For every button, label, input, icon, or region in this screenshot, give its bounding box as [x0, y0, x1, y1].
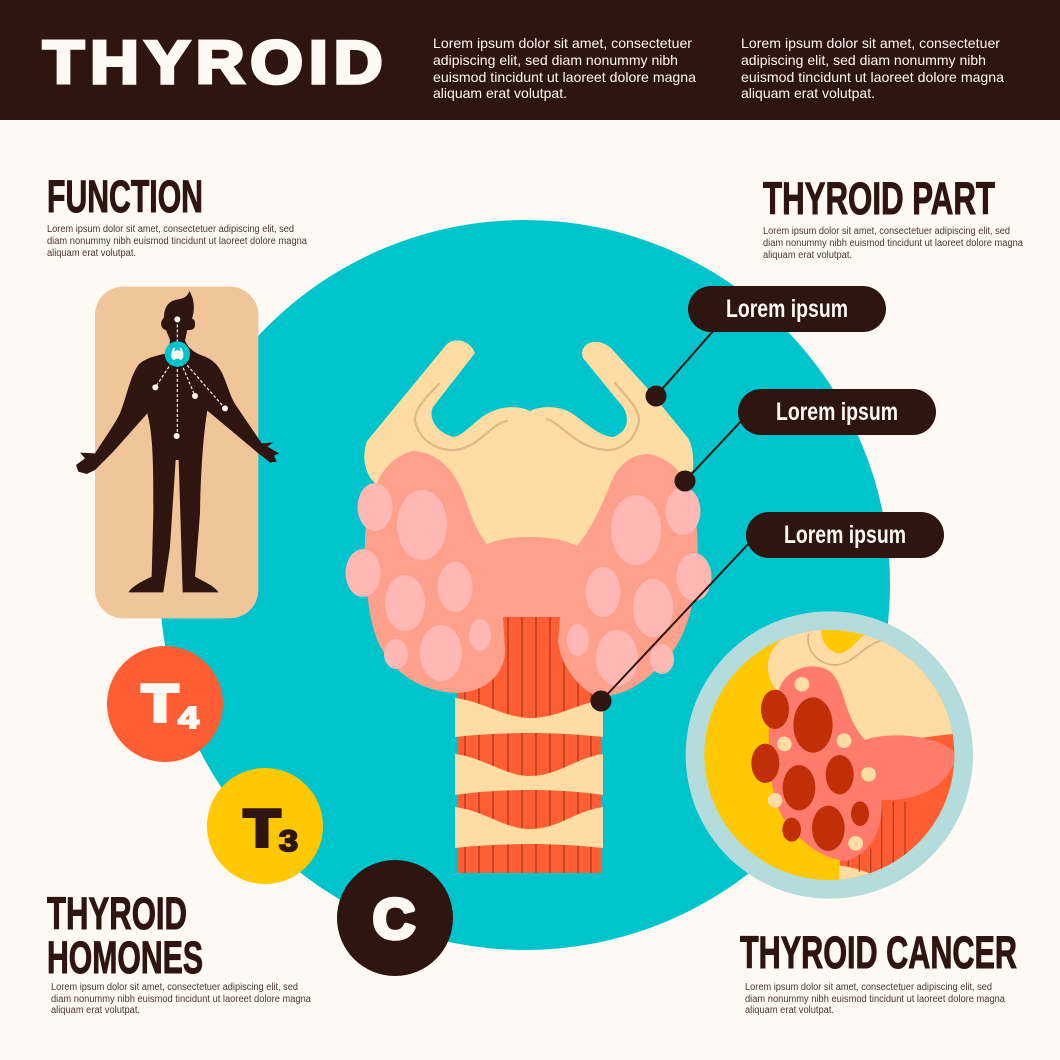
cartilage contour lines: [415, 383, 639, 450]
text: cancer description: [745, 982, 1005, 1016]
magnifier: thyroid cancer detail: [686, 611, 973, 899]
header band: [0, 0, 1060, 120]
text: cancer description: diam nonummy nibh euismod tincidunt ut laoreet dolore magna: [745, 994, 1005, 1005]
text: cancer description: Lorem ipsum dolor sit amet, consectetuer adipiscing elit, sed: [745, 982, 992, 993]
title: THYROID: [43, 29, 382, 96]
header text column 2: euismod tincidunt ut laoreet dolore magna: [741, 69, 1004, 85]
orange trachea area: [840, 722, 960, 885]
hormone badge: C: [337, 860, 453, 976]
text: function description: Lorem ipsum dolor sit amet, consectetuer adipiscing elit, sed: [47, 224, 294, 235]
header text column 1: [433, 35, 696, 101]
small cream cells: [768, 677, 876, 851]
text: hormones description: Lorem ipsum dolor sit amet, consectetuer adipiscing elit, sed: [51, 982, 298, 993]
hormone badge: T3: 3: [279, 825, 298, 858]
text: function description: diam nonummy nibh euismod tincidunt ut laoreet dolore magna: [47, 236, 307, 247]
text: function description: aliquam erat volutpat.: [47, 248, 136, 259]
hormone badge: T3: T: [244, 800, 280, 858]
thyroid lobes: [365, 451, 698, 696]
heading: thyroid hormones: THYROID: [47, 888, 187, 939]
salmon tumour mass: [769, 666, 957, 861]
hormone badge: C: C: [373, 887, 415, 950]
thyroid illustration: [346, 340, 712, 873]
panel: body figure: [76, 287, 279, 618]
callout: label 2: [674, 389, 936, 492]
hormone badge: T4: 4: [178, 700, 200, 735]
text: hormones description: [51, 982, 311, 1016]
heading: thyroid hormones: HOMONES: [47, 932, 203, 983]
hormone badge: T4: T: [142, 675, 178, 733]
text: thyroid part description: diam nonummy nibh euismod tincidunt ut laoreet dolore magna: [763, 238, 1023, 249]
text: thyroid part description: Lorem ipsum dolor sit amet, consectetuer adipiscing elit, sed: [763, 226, 1010, 237]
callout: label 1: [646, 286, 886, 406]
hormone badge: T4: [107, 646, 223, 762]
text: thyroid part description: aliquam erat volutpat.: [763, 250, 852, 261]
header text column 2: [741, 35, 1004, 101]
header text column 2: Lorem ipsum dolor sit amet, consectetuer: [741, 35, 1000, 51]
header text column 1: Lorem ipsum dolor sit amet, consectetuer: [433, 35, 692, 51]
trachea: [457, 612, 602, 873]
heading: function: FUNCTION: [47, 171, 203, 222]
callout: label 3: Lorem ipsum: [784, 521, 906, 549]
callout: label 3: [590, 512, 944, 712]
organ dots: [152, 316, 228, 439]
body silhouette: [76, 291, 279, 592]
header text column 1: aliquam erat volutpat.: [433, 85, 567, 101]
callout: label 1: Lorem ipsum: [726, 295, 848, 323]
header text column 1: euismod tincidunt ut laoreet dolore magna: [433, 69, 696, 85]
text: hormones description: aliquam erat volutpat.: [51, 1005, 140, 1016]
cartilage area: [768, 630, 952, 740]
teal background circle: [160, 220, 890, 950]
dashed connectors: [155, 319, 225, 436]
text: cancer description: aliquam erat volutpat.: [745, 1005, 834, 1016]
right lobe follicles: [567, 487, 712, 686]
yellow notch: [822, 630, 864, 654]
text: function description: [47, 224, 307, 259]
callout: label 2: Lorem ipsum: [776, 398, 898, 426]
tumour nodules: [751, 690, 869, 851]
hormone badge: T3: [207, 768, 323, 884]
thyroid cartilage: [364, 340, 693, 570]
contour line: [808, 633, 882, 665]
cartilage rings: [455, 698, 603, 848]
thyroid badge: [165, 341, 190, 367]
left lobe follicles: [346, 483, 491, 681]
text: thyroid part description: [763, 226, 1023, 261]
text: hormones description: diam nonummy nibh euismod tincidunt ut laoreet dolore magna: [51, 994, 311, 1005]
heading: thyroid hormones: [47, 888, 203, 983]
header text column 2: aliquam erat volutpat.: [741, 85, 875, 101]
header text column 1: adipiscing elit, sed diam nonummy nibh: [433, 52, 678, 68]
header text column 2: adipiscing elit, sed diam nonummy nibh: [741, 52, 986, 68]
stripes: [848, 802, 905, 875]
